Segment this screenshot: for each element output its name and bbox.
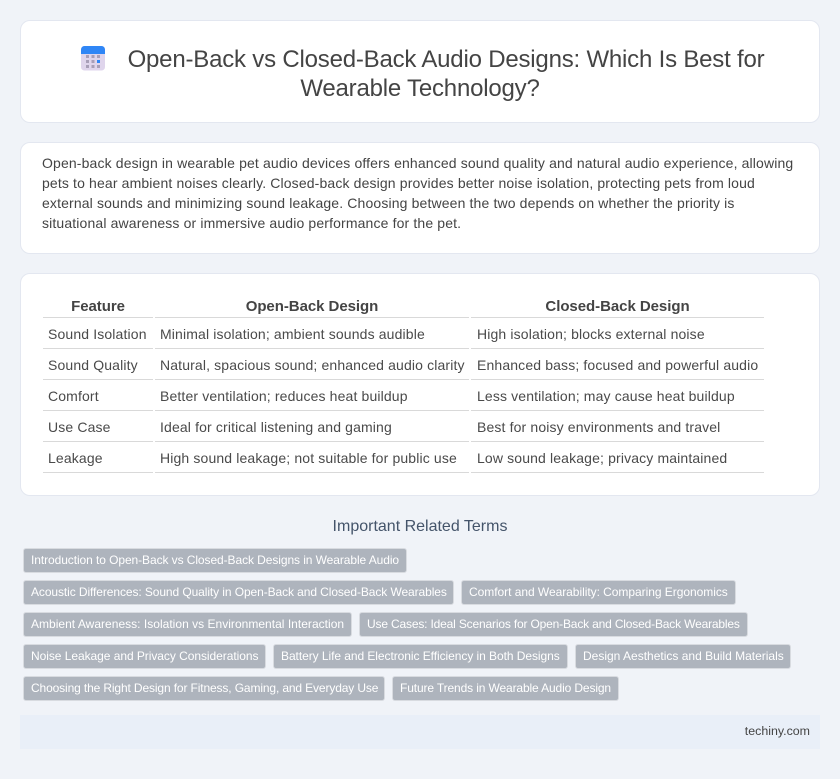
- row: sound isolation: Minimal isolation; ambient sounds audible: [160, 326, 425, 342]
- table header: feature: Feature: [71, 298, 125, 315]
- row: sound quality: Natural, spacious sound; enhanced audio clarity: [160, 357, 465, 373]
- row: comfort: Comfort: [48, 388, 99, 404]
- panel: introduction: [20, 142, 820, 254]
- table header: open-back: Open-Back Design: [246, 298, 378, 315]
- tag: Ambient Awareness: Isolation vs Environmental Interaction: [31, 617, 344, 631]
- tag: [359, 612, 748, 637]
- tag: [23, 612, 352, 637]
- tag: [23, 580, 454, 605]
- row: sound quality: [48, 357, 758, 373]
- tags: related terms: [23, 548, 791, 701]
- row: comfort: Less ventilation; may cause heat buildup: [477, 388, 735, 404]
- intro text: Open-back design in wearable pet audio devices offers enhanced sound quality and natural audio experience, allowing: [42, 155, 793, 171]
- row: use case: [48, 419, 720, 435]
- tag: [575, 644, 791, 669]
- row: sound quality: Enhanced bass; focused and powerful audio: [477, 357, 758, 373]
- tag: [461, 580, 736, 605]
- footer: [20, 715, 820, 749]
- row: leakage: High sound leakage; not suitable for public use: [160, 450, 457, 466]
- row: sound quality: Sound Quality: [48, 357, 138, 373]
- tag: Introduction to Open-Back vs Closed-Back Designs in Wearable Audio: [31, 553, 399, 567]
- tag: [392, 676, 619, 701]
- heading: related terms: Important Related Terms: [333, 518, 507, 535]
- tag: [273, 644, 568, 669]
- tag: Choosing the Right Design for Fitness, Gaming, and Everyday Use: [31, 681, 378, 695]
- table header: closed-back: Closed-Back Design: [545, 298, 690, 315]
- intro text: situational awareness or immersive audio performance for the pet.: [42, 215, 461, 231]
- row: leakage: Low sound leakage; privacy maintained: [477, 450, 727, 466]
- intro text: [42, 155, 793, 231]
- tag: Future Trends in Wearable Audio Design: [400, 681, 611, 695]
- tag: [23, 644, 266, 669]
- row: use case: Use Case: [48, 419, 111, 435]
- footer: techiny.com: [745, 724, 810, 738]
- row: comfort: [48, 388, 735, 404]
- row: leakage: Leakage: [48, 450, 103, 466]
- tag: Design Aesthetics and Build Materials: [583, 649, 784, 663]
- title: Wearable Technology?: [300, 75, 540, 102]
- row: leakage: [48, 450, 727, 466]
- tag: Battery Life and Electronic Efficiency in Both Designs: [281, 649, 560, 663]
- tag: Acoustic Differences: Sound Quality in Open-Back and Closed-Back Wearables: [31, 585, 447, 599]
- row: comfort: Better ventilation; reduces heat buildup: [160, 388, 408, 404]
- tag: [23, 548, 407, 573]
- title: Open-Back vs Closed-Back Audio Designs: Which Is Best for: [128, 46, 764, 73]
- tag: [23, 676, 385, 701]
- intro text: pets to hear ambient noises clearly. Closed-back design provides better noise isolation, protecting pets from loud: [42, 175, 755, 191]
- row: sound isolation: Sound Isolation: [48, 326, 147, 342]
- icon: calendar: [81, 46, 105, 70]
- tag: Use Cases: Ideal Scenarios for Open-Back and Closed-Back Wearables: [367, 617, 740, 631]
- title: [128, 46, 764, 102]
- panel: header: [20, 20, 820, 123]
- tag: Comfort and Wearability: Comparing Ergonomics: [469, 585, 728, 599]
- intro text: external sounds and minimizing sound leakage. Choosing between the two depends on whether the priority is: [42, 195, 735, 211]
- row: use case: Ideal for critical listening and gaming: [160, 419, 392, 435]
- row: sound isolation: High isolation; blocks external noise: [477, 326, 705, 342]
- panel: comparison table: [20, 273, 820, 496]
- row: sound isolation: [48, 326, 705, 342]
- row: use case: Best for noisy environments and travel: [477, 419, 720, 435]
- tag: Noise Leakage and Privacy Considerations: [31, 649, 258, 663]
